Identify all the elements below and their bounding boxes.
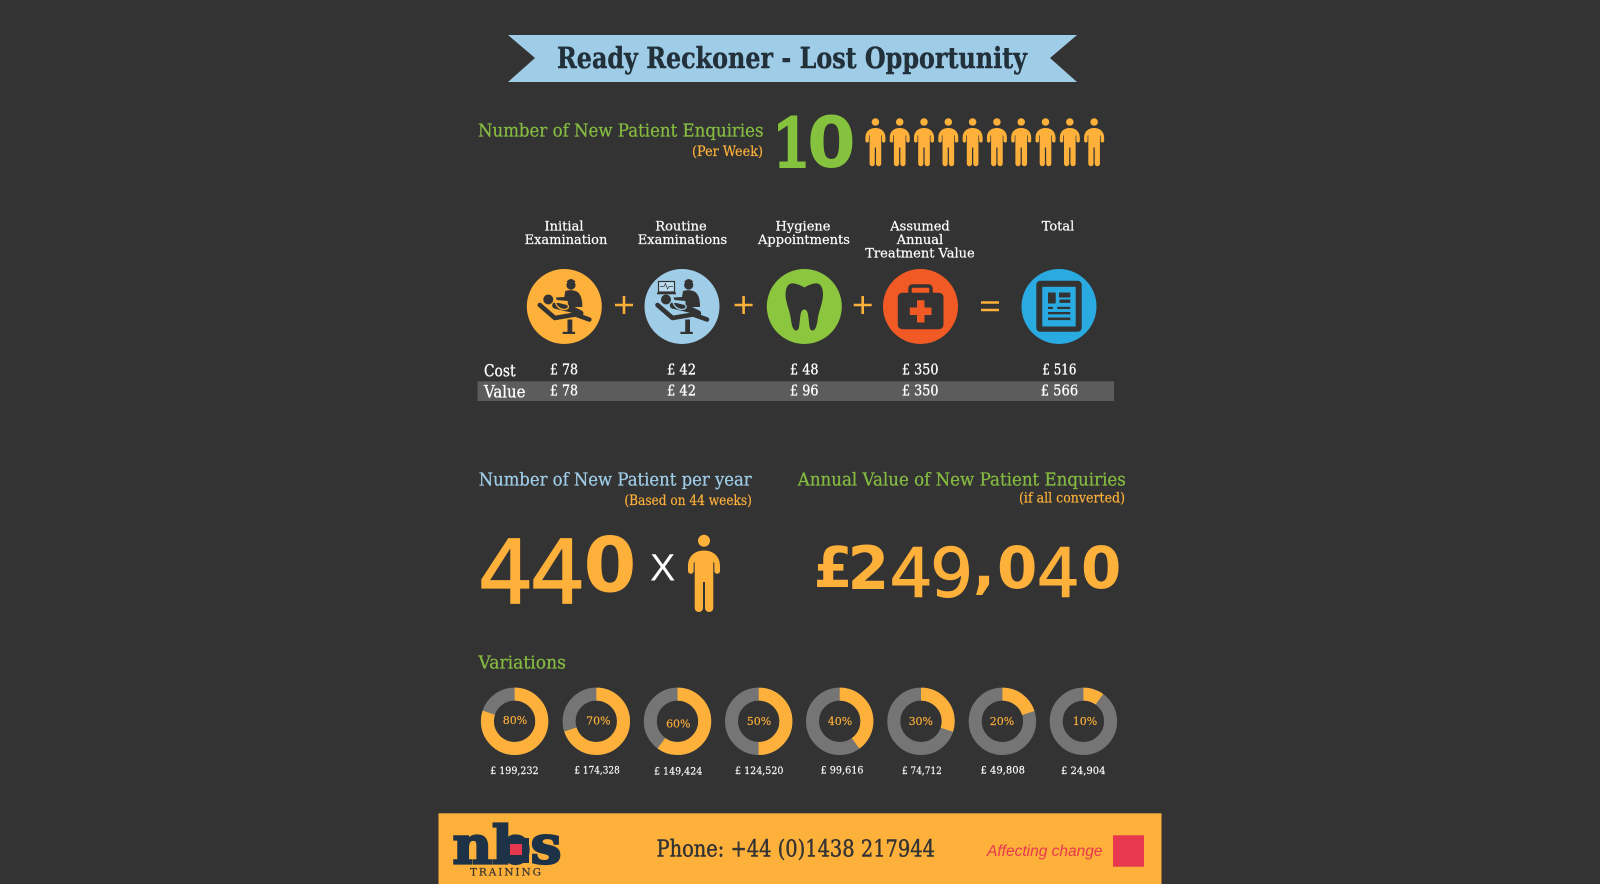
heading: initial examination: Initial xyxy=(545,220,583,234)
title banner xyxy=(508,35,1077,82)
heading: hygiene appointments: Hygiene xyxy=(776,220,831,234)
per year label: Number of New Patient per year xyxy=(479,471,752,491)
donut: 50%: 50% xyxy=(747,715,771,728)
if all converted note: (if all converted) xyxy=(1019,491,1125,507)
big amount: 0 xyxy=(997,534,1037,602)
value row: £ 566 xyxy=(1041,384,1078,400)
big amount: , xyxy=(973,533,995,601)
heading: hygiene appointments: Appointments xyxy=(757,233,850,248)
donut: 80% xyxy=(487,694,542,777)
donut: 60%: 60% xyxy=(666,717,691,730)
tagline: Affecting change xyxy=(986,843,1103,860)
value row band xyxy=(478,381,1114,401)
per week note: (Per Week) xyxy=(692,144,763,160)
annual value block xyxy=(797,471,1126,614)
big amount: 0 xyxy=(1081,534,1121,602)
value row: £ 96 xyxy=(790,384,818,400)
big amount: 9 xyxy=(930,534,973,614)
heading: assumed annual treatment value: Treatment Value xyxy=(865,246,975,262)
number ten: 0 xyxy=(807,102,856,184)
icon: row of ten people xyxy=(865,118,1104,166)
heading: assumed annual treatment value: Annual xyxy=(896,233,943,248)
based on 44 weeks note: (Based on 44 weeks) xyxy=(624,493,752,509)
big number 440: 4 xyxy=(530,521,586,624)
variations heading: Variations xyxy=(477,653,566,673)
heading: routine examinations: Examinations xyxy=(638,233,727,248)
number ten: 1 xyxy=(772,106,814,182)
icon: dentist with patient on orange circle xyxy=(527,269,602,344)
donut: 50%: £ 124,520 xyxy=(735,765,784,777)
red square xyxy=(1113,835,1144,867)
heading: initial examination: Examination xyxy=(525,233,608,248)
donut: 20% xyxy=(975,694,1030,776)
plus sign xyxy=(854,296,872,314)
cost row: £ 350 xyxy=(902,362,938,378)
cost row: £ 78 xyxy=(550,362,578,378)
icon: dentist with monitor on blue circle xyxy=(644,269,720,344)
big amount: 2 xyxy=(848,534,889,604)
multiply sign: X xyxy=(650,548,675,590)
heading: routine examinations: Routine xyxy=(655,220,707,234)
new patients per year block xyxy=(478,471,752,624)
equals sign xyxy=(981,302,999,310)
big amount: 4 xyxy=(889,534,933,614)
icon: tooth on green circle xyxy=(767,269,842,344)
value row xyxy=(483,382,1078,402)
column headings xyxy=(525,220,1074,262)
annual value label: Annual Value of New Patient Enquiries xyxy=(797,471,1126,491)
icon: tablet report on blue circle xyxy=(1022,269,1096,344)
value row: Value xyxy=(483,382,526,402)
donut: 60% xyxy=(650,694,705,778)
donut: 70%: 70% xyxy=(586,715,611,728)
icon: medical kit on red circle xyxy=(883,269,958,344)
donut: 40%: £ 99,616 xyxy=(821,764,864,776)
title text: Ready Reckoner - Lost Opportunity xyxy=(557,41,1028,75)
donut: 40% xyxy=(812,694,867,776)
nbs training logo: nbs xyxy=(452,815,562,876)
value row: £ 350 xyxy=(902,384,938,400)
donut: 80%: 80% xyxy=(503,714,527,727)
donut: 40%: 40% xyxy=(828,715,852,728)
donut: 10%: 10% xyxy=(1073,715,1097,728)
cost row: £ 42 xyxy=(667,362,696,378)
footer band xyxy=(438,813,1162,884)
value row: £ 78 xyxy=(550,384,578,400)
donut: 10% xyxy=(1056,694,1111,777)
banner ribbon xyxy=(508,35,1077,82)
donut: 80%: £ 199,232 xyxy=(490,765,539,777)
plus sign xyxy=(615,296,633,314)
plus sign xyxy=(735,296,753,314)
big number 440: 0 xyxy=(584,520,636,610)
donut: 30% xyxy=(894,694,948,777)
donut: 20%: £ 49,808 xyxy=(980,764,1025,776)
enquiries label: Number of New Patient Enquiries xyxy=(478,122,764,142)
donut: 20%: 20% xyxy=(990,715,1014,728)
value row: £ 42 xyxy=(667,384,696,400)
cost row: £ 48 xyxy=(790,362,818,378)
enquiries headline xyxy=(478,102,856,184)
donut: 30%: £ 74,712 xyxy=(902,765,942,777)
donut: 70%: £ 174,328 xyxy=(574,764,620,776)
donut: 30%: 30% xyxy=(909,715,933,728)
donut: 70% xyxy=(569,694,624,776)
donut: 60%: £ 149,424 xyxy=(654,766,703,778)
phone number: Phone: +44 (0)1438 217944 xyxy=(656,837,935,863)
heading: assumed annual treatment value: Assumed xyxy=(889,220,950,234)
big amount: £ xyxy=(814,536,853,601)
cost and value table xyxy=(478,362,1114,402)
nbs training logo: TRAINING xyxy=(470,867,541,879)
cost row: Cost xyxy=(484,362,516,380)
big number 440: 4 xyxy=(478,521,534,624)
cost row: £ 516 xyxy=(1042,362,1076,378)
cost row xyxy=(484,362,1076,380)
big amount: 4 xyxy=(1037,534,1080,614)
heading: total: Total xyxy=(1042,220,1074,234)
donut: 10%: £ 24,904 xyxy=(1061,765,1106,777)
icon: person xyxy=(688,535,720,612)
donut: 50% xyxy=(732,694,786,777)
